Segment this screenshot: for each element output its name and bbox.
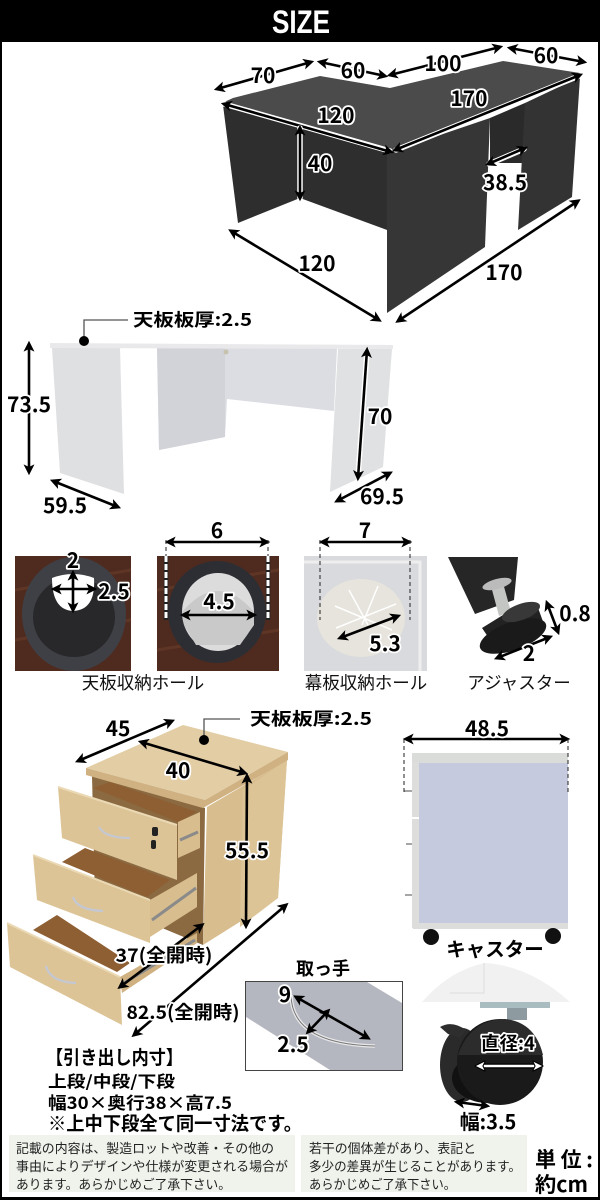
panel: white desk with dimensions — [7, 307, 404, 520]
arrows: 2 × 2.5 opening — [54, 545, 130, 610]
dimension: diameter 4: 直径:4 — [481, 1030, 535, 1056]
icon: casters — [423, 928, 561, 945]
arrow: top 60: 60 — [341, 55, 365, 85]
text block: drawer inner dimensions: 【引き出し内寸】 — [46, 1043, 183, 1070]
arrow: depth 59.5: 59.5 — [43, 490, 87, 520]
callout: top thickness 2.5 — [199, 706, 372, 745]
dimension 7 — [320, 515, 410, 620]
arrow: panel height 40: 40 — [308, 148, 332, 178]
panel: caster detail — [422, 963, 570, 1135]
arrow: total height 73.5: 73.5 — [7, 389, 51, 419]
arrow: width 45 — [78, 713, 172, 761]
note: left disclaimer — [9, 1135, 295, 1193]
arrows: adjuster 0.8 and 2: 0.8 — [559, 598, 591, 628]
arrow: desktop 170: 170 — [450, 83, 488, 113]
note: left disclaimer: あります。あらかじめご了承下さい。 — [16, 1174, 231, 1193]
arrow: floor 170: 170 — [485, 257, 523, 287]
arrows: 2 × 2.5 opening: 2.5 — [98, 576, 130, 606]
dimension 7: 7 — [359, 515, 371, 545]
arrow: 5.3 opening: 5.3 — [369, 628, 401, 658]
note: right disclaimer: 多少の差異が生じることがあります。 — [309, 1156, 521, 1175]
arrow: top right 60 — [510, 40, 584, 70]
arrow: inner height 70: 70 — [368, 401, 392, 431]
arrow: 37 fully open — [116, 925, 212, 987]
panel: dark L-shaped desk with dimensions — [217, 40, 584, 321]
arrow: top 100 — [390, 47, 500, 78]
dimension 48.5: 48.5 — [465, 713, 509, 743]
dimension: width 3.5: 幅:3.5 — [460, 1106, 516, 1135]
text: unit label — [535, 1144, 593, 1199]
arrows: adjuster 0.8 and 2: 2 — [523, 638, 535, 668]
note: right disclaimer — [301, 1135, 527, 1193]
title: SIZE header — [0, 0, 600, 42]
arrow: top right 60: 60 — [534, 40, 558, 70]
arrow: desktop 120: 120 — [317, 100, 355, 130]
dimension 9 — [279, 979, 368, 1038]
callout: top thickness 2.5: 天板板厚:2.5 — [250, 706, 372, 731]
panel: top cable hole, closed — [15, 545, 131, 671]
arrow: 4.5 opening — [183, 586, 254, 616]
arrows: adjuster 0.8 and 2 — [497, 598, 591, 668]
arrow: floor 170 — [398, 201, 578, 321]
arrow: floor 120 — [231, 231, 379, 320]
arrow: top 60 — [320, 55, 385, 85]
arrow: 37 fully open: 37(全開時) — [116, 942, 212, 968]
title: SIZE header: SIZE — [272, 4, 330, 40]
dimension 2.5: 2.5 — [277, 1029, 309, 1059]
arrow: desktop 170 — [395, 75, 580, 150]
text block: drawer inner dimensions: ※上中下段全て同一寸法です。 — [48, 1109, 302, 1136]
caption: modesty panel cable hole: 幕板収納ホール — [305, 670, 427, 695]
arrow: depth 69.5: 69.5 — [360, 481, 404, 511]
note: left disclaimer: 記載の内容は、製造ロットや改善・その他の — [16, 1138, 274, 1157]
cabinet illustration — [7, 725, 288, 1025]
arrow: total height 73.5 — [7, 344, 51, 472]
callout: top thickness 2.5: 天板板厚:2.5 — [133, 307, 252, 332]
caption: top cable hole: 天板収納ホール — [82, 670, 204, 695]
text: unit label: 約cm — [535, 1169, 588, 1199]
heading: pull handle: 取っ手 — [296, 955, 350, 981]
arrow: height 55.5: 55.5 — [225, 835, 269, 865]
panel: wooden drawer cabinet — [7, 706, 372, 1035]
arrow: top 70: 70 — [251, 60, 275, 90]
arrows: 2 × 2.5 opening: 2 — [67, 545, 79, 575]
arrow: desktop 120 — [224, 100, 391, 152]
note: right disclaimer: 若干の個体差があり、表記と — [309, 1138, 476, 1157]
arrow: depth 59.5 — [43, 481, 118, 520]
arrow: 4.5 opening: 4.5 — [203, 586, 235, 616]
arrow: gap 38.5: 38.5 — [483, 167, 527, 197]
dimension 6: 6 — [211, 515, 223, 545]
callout: top thickness 2.5 — [79, 307, 252, 346]
arrow: depth 40 — [141, 742, 245, 785]
panel: pull handle detail — [246, 979, 402, 1070]
arrow: top 70 — [217, 60, 311, 90]
panel: top cable hole, open — [157, 515, 279, 671]
arrow: 82.5 fully open — [126, 905, 286, 1035]
arrow: floor 120: 120 — [298, 248, 336, 278]
white desk illustration — [50, 343, 393, 494]
note: left disclaimer: 事由によりデザインや仕様が変更される場合が — [16, 1156, 288, 1175]
dimension 6 — [166, 515, 268, 620]
arrow: gap 38.5 — [483, 148, 527, 197]
panel: adjuster foot — [448, 557, 591, 668]
arrow: depth 69.5 — [337, 473, 404, 511]
caption: adjuster: アジャスター — [467, 670, 571, 695]
arrow: 5.3 opening — [340, 616, 401, 658]
note: right disclaimer: あらかじめご了承下さい。 — [309, 1174, 456, 1193]
arrow: panel height 40 — [300, 128, 332, 198]
dimension 9: 9 — [279, 979, 291, 1009]
text block: drawer inner dimensions: 幅30×奥行38×高7.5 — [48, 1089, 232, 1114]
heading: casters: キャスター — [446, 933, 544, 962]
dimension: diameter 4 — [478, 1030, 540, 1066]
text block: drawer inner dimensions — [46, 1043, 302, 1136]
desk illustration — [222, 61, 580, 313]
panel: white cabinet side view — [404, 713, 568, 945]
text: unit label: 単位: — [535, 1144, 593, 1174]
panel: modesty panel cable hole — [304, 515, 427, 671]
dimension 2.5 — [277, 1011, 328, 1059]
arrow: 82.5 fully open: 82.5(全開時) — [126, 999, 240, 1025]
arrow: depth 40: 40 — [166, 755, 190, 785]
text block: drawer inner dimensions: 上段/中段/下段 — [48, 1068, 175, 1092]
arrow: width 45: 45 — [106, 713, 130, 743]
arrow: top 100: 100 — [424, 48, 462, 78]
arrow: inner height 70 — [358, 350, 392, 478]
